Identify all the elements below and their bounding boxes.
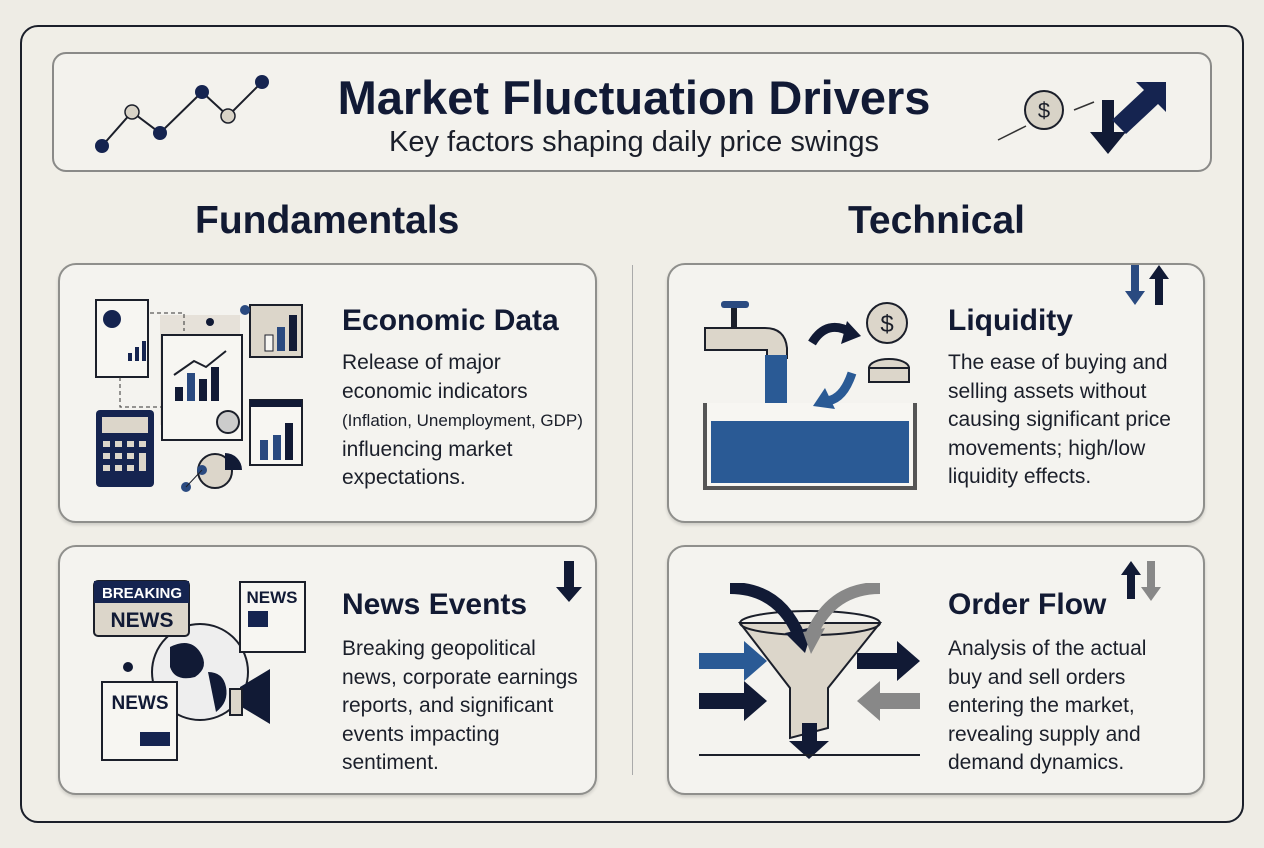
panel: Order Flow (667, 545, 1205, 795)
heading: Technical: Technical (848, 199, 1025, 242)
heading: News Events (342, 588, 527, 621)
body text (948, 351, 1171, 488)
body text (948, 637, 1146, 774)
subtitle: Key factors shaping daily price swings (389, 126, 879, 158)
body text: Breaking geopolitical (342, 637, 536, 660)
icon: news and globe: NEWS (246, 588, 298, 607)
body text: liquidity effects. (948, 465, 1091, 488)
icon: news and globe: BREAKING (102, 585, 182, 602)
body text: entering the market, (948, 694, 1135, 717)
body text: sentiment. (342, 751, 439, 774)
body text: selling assets without (948, 380, 1146, 402)
icon: funnel with arrows (699, 583, 920, 759)
body text: expectations. (342, 466, 466, 489)
panel: Economic Data (58, 263, 597, 523)
arrow: down (556, 561, 582, 602)
body text: news, corporate earnings (342, 666, 578, 688)
icon: coin and arrows (998, 82, 1166, 154)
panel: News Events (58, 545, 597, 795)
body text: movements; high/low (948, 436, 1145, 460)
body text: reports, and significant (342, 694, 553, 717)
icon: line chart (95, 75, 269, 153)
body text: Release of major (342, 351, 501, 374)
body text: demand dynamics. (948, 751, 1124, 774)
body text: influencing market (342, 438, 512, 460)
icon: charts and calculator (95, 299, 303, 492)
arrows: up/down (1125, 265, 1169, 305)
icon: news and globe: NEWS (110, 609, 174, 632)
body text: economic indicators (342, 380, 528, 402)
icon: tap, coins, basin: $ (880, 311, 894, 338)
icon: news and globe: NEWS (112, 693, 168, 714)
heading: Order Flow (948, 588, 1106, 621)
body text: events impacting (342, 722, 500, 746)
icon: news and globe (93, 580, 306, 761)
heading: Economic Data (342, 304, 559, 337)
heading: Fundamentals: Fundamentals (195, 199, 459, 242)
body text: The ease of buying and (948, 351, 1168, 374)
arrows: up/down (1121, 561, 1161, 601)
body text: causing significant price (948, 408, 1171, 431)
title: Market Fluctuation Drivers (338, 71, 930, 124)
body text: revealing supply and (948, 722, 1141, 746)
icon: tap, coins, basin (703, 301, 917, 490)
heading: Liquidity (948, 304, 1073, 337)
body text: buy and sell orders (948, 666, 1125, 688)
body text (342, 637, 578, 774)
body text: (Inflation, Unemployment, GDP) (342, 411, 583, 430)
header panel (52, 52, 1212, 172)
panel: Liquidity (667, 263, 1205, 523)
body text: Analysis of the actual (948, 637, 1146, 660)
icon: coin and arrows: $ (1038, 98, 1050, 123)
body text (342, 351, 583, 489)
